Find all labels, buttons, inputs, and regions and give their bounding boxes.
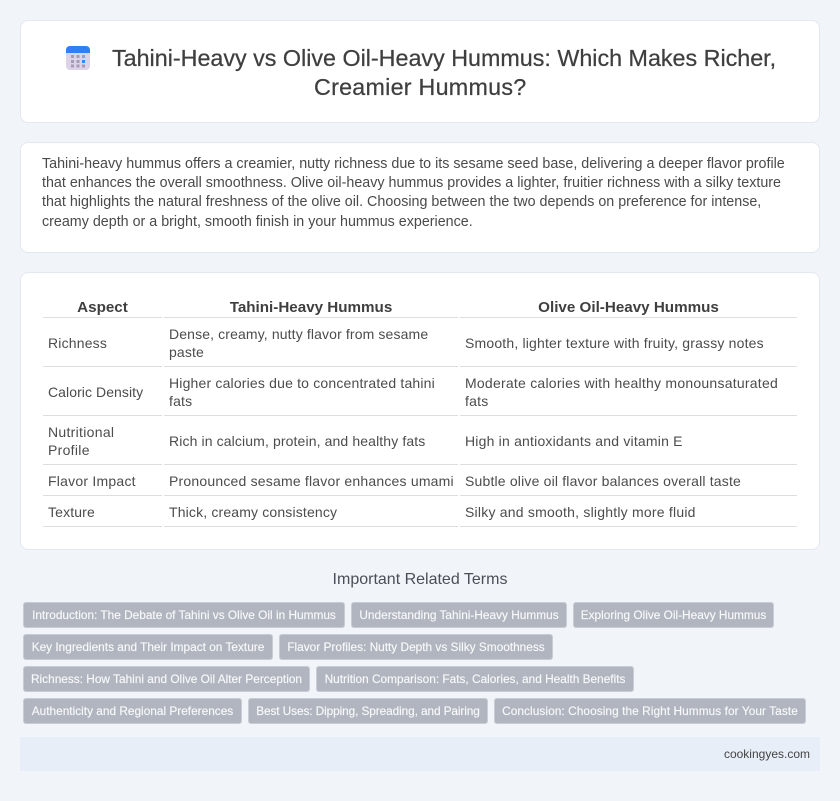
- tag 4: [23, 634, 273, 660]
- table header row: Olive Oil-Heavy Hummus: [538, 299, 719, 316]
- row: flavor impact: Pronounced sesame flavor enhances umami: [169, 473, 454, 489]
- row: texture: Texture: [48, 504, 95, 520]
- tag 8: Authenticity and Regional Preferences: [32, 704, 233, 718]
- tag 3: [573, 602, 774, 628]
- table card: [20, 272, 820, 550]
- related term tags: [23, 602, 806, 724]
- row: nutritional profile: Nutritional: [48, 424, 114, 440]
- tag 2: Understanding Tahini-Heavy Hummus: [359, 608, 559, 622]
- row: caloric density: fats: [169, 393, 192, 409]
- row: nutritional profile: [43, 424, 797, 465]
- row: caloric density: [43, 375, 797, 416]
- row: texture: [43, 504, 797, 527]
- title: Creamier Hummus?: [314, 74, 526, 100]
- row: texture: Thick, creamy consistency: [169, 504, 337, 520]
- description text: Tahini-heavy hummus offers a creamier, nutty richness due to its sesame seed base, delivering a deeper flavor profile: [42, 156, 785, 172]
- tag 4: Key Ingredients and Their Impact on Texture: [32, 640, 264, 654]
- title: Tahini-Heavy vs Olive Oil-Heavy Hummus: Which Makes Richer,: [112, 45, 776, 71]
- row: richness: paste: [169, 344, 204, 360]
- row: nutritional profile: Profile: [48, 442, 90, 458]
- row: nutritional profile: High in antioxidants and vitamin E: [465, 433, 683, 449]
- footer bar: [20, 737, 820, 771]
- row: richness: Richness: [48, 335, 107, 351]
- comparison table: [43, 299, 797, 527]
- title card: [20, 20, 820, 123]
- row: caloric density: Caloric Density: [48, 384, 143, 400]
- tag 9: [248, 698, 488, 724]
- row: caloric density: fats: [465, 393, 489, 409]
- description text: [42, 156, 785, 230]
- description text: creamy depth or a bright, smooth finish in your hummus experience.: [42, 214, 473, 230]
- row: richness: Dense, creamy, nutty flavor from sesame: [169, 326, 428, 342]
- table header row: Aspect: [77, 299, 128, 316]
- tag 6: [23, 666, 310, 692]
- tag 7: [316, 666, 634, 692]
- tag 9: Best Uses: Dipping, Spreading, and Pairing: [256, 704, 480, 718]
- tag 5: [279, 634, 553, 660]
- title: [112, 45, 776, 100]
- tag 1: [23, 602, 345, 628]
- footer text: cookingyes.com: [724, 747, 810, 761]
- row: flavor impact: Flavor Impact: [48, 473, 136, 489]
- table header row: Tahini-Heavy Hummus: [230, 299, 392, 316]
- tag 10: [494, 698, 806, 724]
- tag 1: Introduction: The Debate of Tahini vs Olive Oil in Hummus: [32, 608, 336, 622]
- tag 5: Flavor Profiles: Nutty Depth vs Silky Smoothness: [287, 640, 545, 654]
- description text: that enhances the overall smoothness. Olive oil-heavy hummus provides a lighter, fruitier richness with a silky texture: [42, 175, 781, 191]
- row: caloric density: Higher calories due to concentrated tahini: [169, 375, 435, 391]
- row: flavor impact: Subtle olive oil flavor balances overall taste: [465, 473, 741, 489]
- row: richness: Smooth, lighter texture with fruity, grassy notes: [465, 335, 764, 351]
- tag 8: [23, 698, 242, 724]
- description card: [20, 142, 820, 253]
- table header row: [43, 299, 797, 318]
- description text: that highlights the natural freshness of the olive oil. Choosing between the two depends on preference for intense,: [42, 194, 761, 210]
- icon: calendar: [66, 46, 90, 70]
- row: nutritional profile: Rich in calcium, protein, and healthy fats: [169, 433, 425, 449]
- tag 7: Nutrition Comparison: Fats, Calories, and Health Benefits: [325, 672, 625, 686]
- row: texture: Silky and smooth, slightly more fluid: [465, 504, 696, 520]
- tag 10: Conclusion: Choosing the Right Hummus for Your Taste: [502, 704, 798, 718]
- tag 6: Richness: How Tahini and Olive Oil Alter Perception: [31, 672, 302, 686]
- row: caloric density: Moderate calories with healthy monounsaturated: [465, 375, 778, 391]
- heading: related terms: Important Related Terms: [333, 571, 507, 588]
- tag 2: [351, 602, 567, 628]
- row: flavor impact: [43, 473, 797, 496]
- row: richness: [43, 326, 797, 367]
- tag 3: Exploring Olive Oil-Heavy Hummus: [581, 608, 766, 622]
